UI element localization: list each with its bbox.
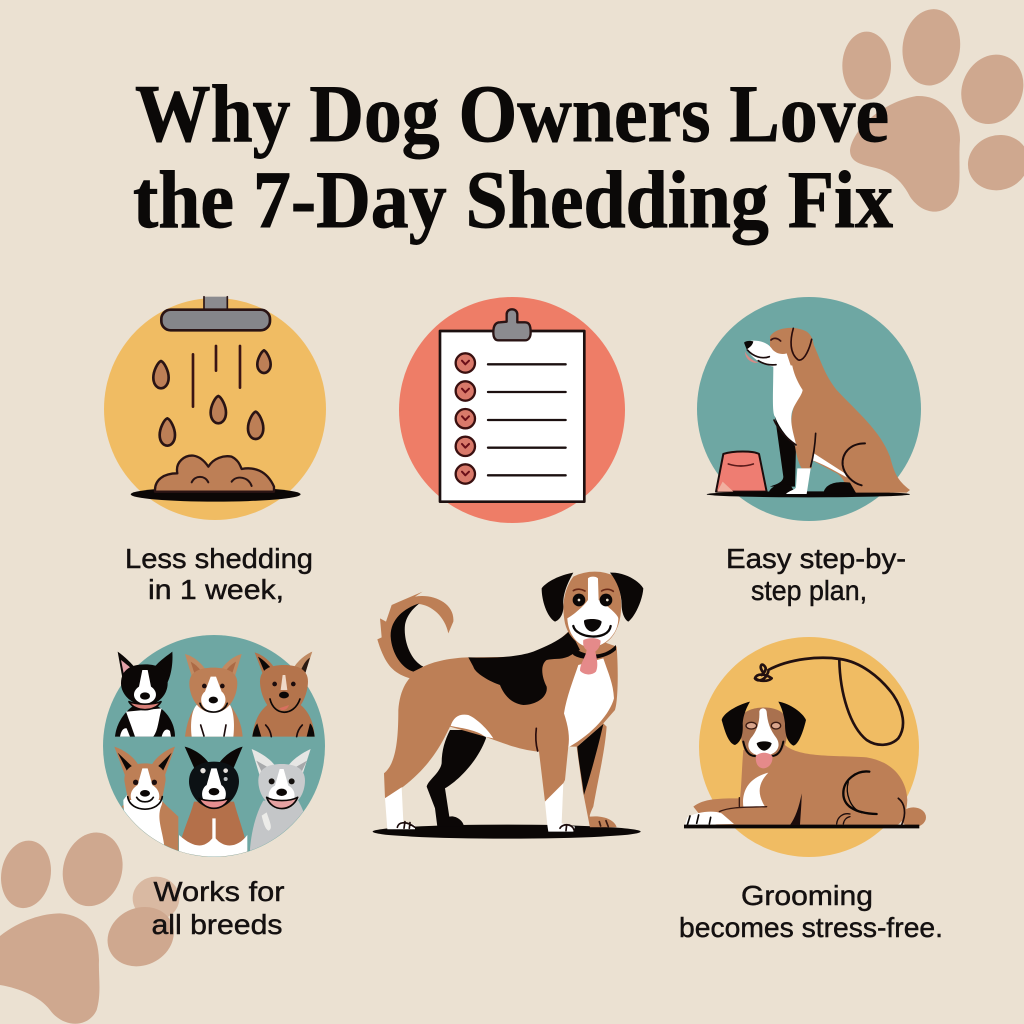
icon: fur pile [131, 456, 301, 502]
decorative paw print: top right [842, 5, 1024, 212]
ground shadow [373, 825, 641, 839]
dog portrait: black with tan chest [179, 747, 247, 858]
main illustration: standing dog [373, 572, 643, 839]
white hip patch [451, 715, 493, 738]
caption: easy plan: Easy step-by- [726, 543, 906, 574]
far foreleg [577, 723, 617, 827]
white chest [564, 658, 614, 747]
decorative paw print: bottom left [0, 826, 184, 1024]
back black patch [468, 630, 580, 705]
caption: works for all breeds: all breeds [152, 909, 282, 940]
far hind leg [427, 730, 486, 827]
caption: less shedding: Less shedding [125, 543, 313, 574]
dog portrait: tan and white [114, 747, 178, 857]
collar [570, 643, 616, 659]
caption: grooming stress-free [679, 880, 943, 943]
foreleg white sock [545, 783, 575, 832]
tail [377, 592, 453, 678]
title: Why Dog Owners Love [135, 68, 889, 159]
icon: food bowl [716, 451, 767, 492]
icon: lying dog [684, 702, 926, 828]
dog portrait: brown [252, 652, 315, 737]
caption: works for all breeds [152, 876, 284, 940]
panel: all breeds dog portraits [103, 635, 325, 859]
dog portrait row: bottom three [114, 747, 312, 859]
caption: easy plan: step plan, [751, 575, 867, 606]
belly crease [536, 728, 538, 751]
panel: stress-free grooming icon [684, 637, 926, 857]
caption: grooming stress-free: becomes stress-free. [679, 912, 943, 943]
dog portrait: tan with white chest [185, 654, 243, 737]
caption: grooming stress-free: Grooming [741, 880, 873, 911]
icon: water streaks and hair drops [153, 346, 271, 446]
title: the 7-Day Shedding Fix [133, 154, 893, 245]
caption: easy plan [726, 543, 906, 606]
panel: happy sitting dog icon [697, 297, 921, 521]
panel: checklist icon [399, 297, 625, 523]
checklist rows [456, 353, 566, 484]
icon: clipboard sheet [440, 331, 584, 502]
title [133, 68, 893, 245]
body [384, 630, 618, 802]
head [542, 572, 643, 647]
icon: leash [755, 658, 903, 745]
hind leg white sock [385, 787, 415, 829]
icon: sitting dog [707, 328, 910, 497]
tongue [580, 638, 601, 674]
dog portrait: grey [250, 749, 312, 859]
caption: works for all breeds: Works for [154, 876, 284, 907]
icon: clipboard clip [493, 309, 531, 340]
caption: less shedding: in 1 week, [148, 574, 284, 605]
panel: less shedding icon [104, 297, 326, 520]
icon: shower head [161, 297, 270, 330]
dog portrait: black and white [115, 652, 175, 737]
caption: less shedding [125, 543, 313, 605]
